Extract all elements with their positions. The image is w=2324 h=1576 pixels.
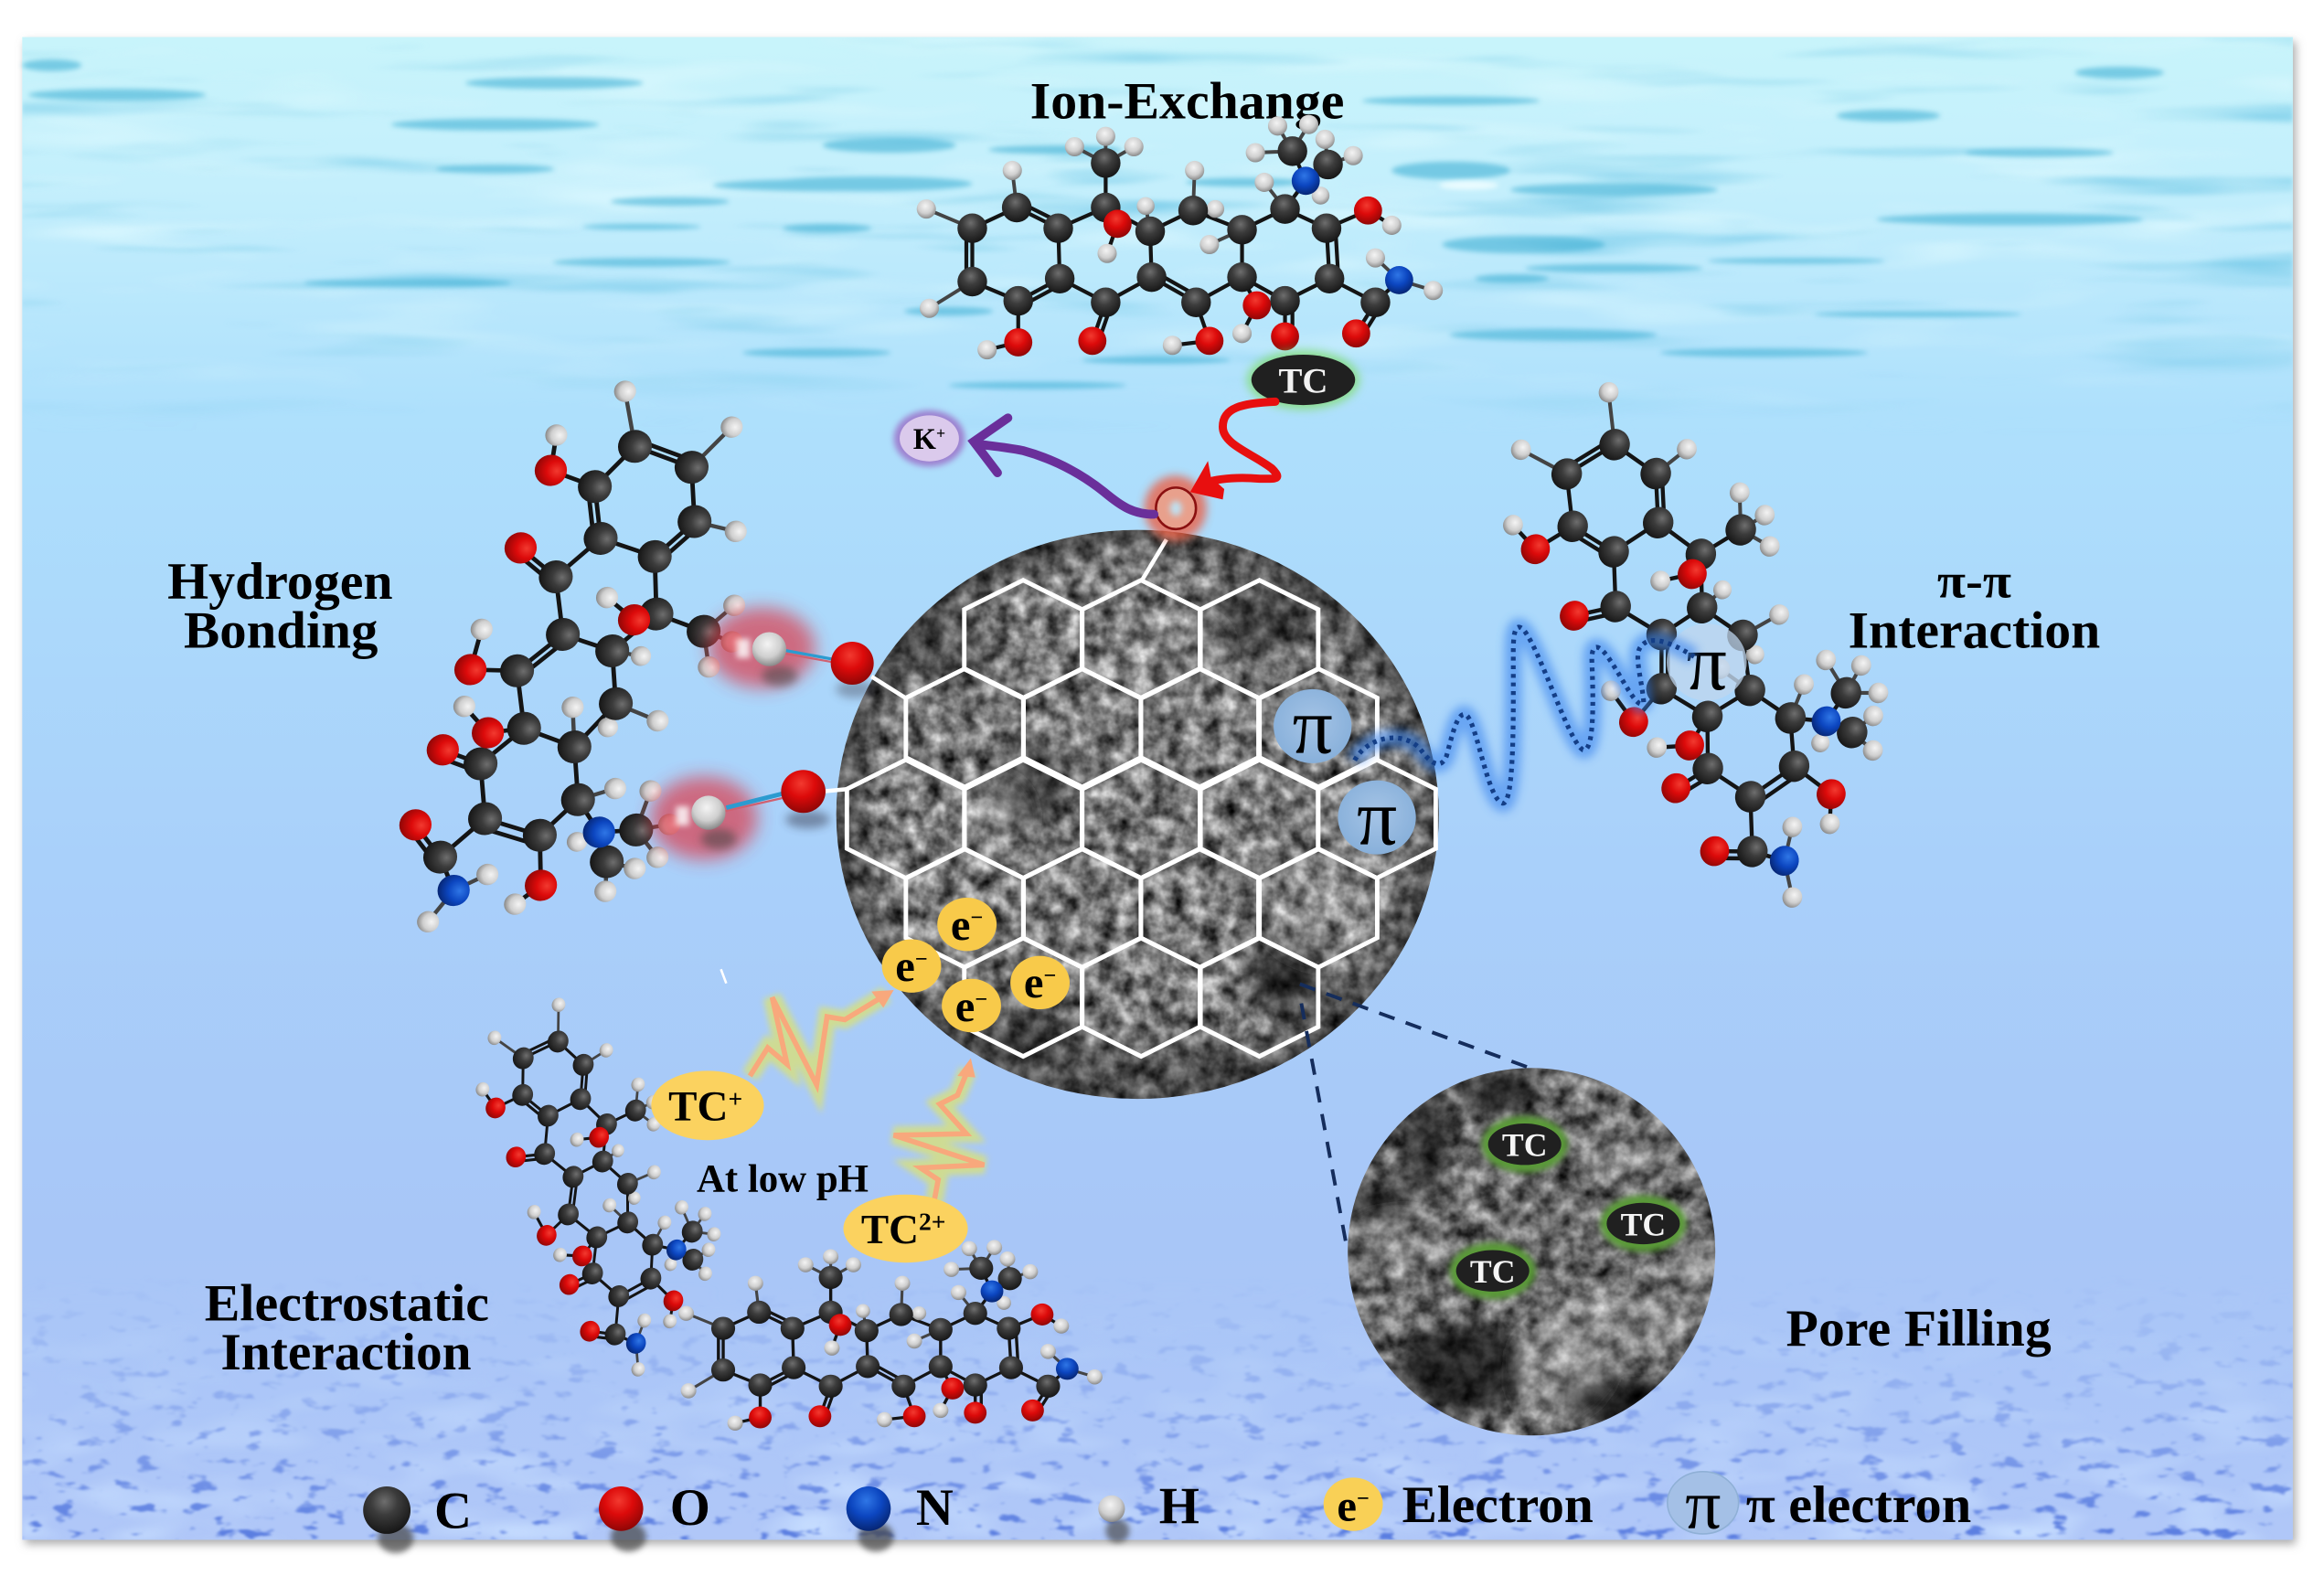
label: Electrostatic Interaction: Electrostatic [205,1274,489,1332]
electron badges on adsorbent: e [951,900,971,950]
pi electron on adsorbate: π [1687,618,1727,707]
panel: ion exchange arrows and badges [894,350,1359,541]
TC in pore 1 [1482,1116,1568,1173]
pi electrons on adsorbent: π [1357,772,1397,861]
legend: pi electron: π electron [1746,1476,1971,1534]
TC in pore 1: TC [1502,1127,1547,1164]
label: Electrostatic Interaction [205,1274,489,1381]
pi electron on adsorbate [1667,618,1747,707]
label: At low pH: At low pH [697,1156,869,1200]
K+ badge: K [913,423,936,456]
red arrow: TC to site [1190,401,1277,499]
electron badges on adsorbent: − [1043,964,1056,988]
legend: oxygen [599,1479,710,1551]
TC in pore 2 [1600,1196,1686,1251]
panel: pore filling SEM circle [1341,1061,1721,1441]
molecule: tetracycline (electrostatic bottom) [678,1240,1103,1431]
TC2+ badge: TC [861,1207,919,1252]
molecule: tetracycline (pi-pi) [1468,332,1955,944]
legend [363,1464,1971,1553]
K+ badge: + [936,424,945,442]
white tick mark [721,969,726,984]
electron badges on adsorbent: − [975,987,987,1012]
TC badge: TC [1278,362,1328,401]
electron badges on adsorbent: − [915,947,928,972]
legend: pi electron: π [1685,1464,1721,1543]
electron badges on adsorbent: e [955,982,975,1031]
label: Hydrogen Bonding: Hydrogen [167,553,393,611]
legend: hydrogen: H [1159,1478,1199,1536]
label: Hydrogen Bonding [167,553,393,659]
TC in pore 3: TC [1470,1253,1515,1290]
legend: electron: Electron [1402,1476,1594,1534]
pi electrons on adsorbent [1274,682,1416,861]
legend: carbon: C [434,1482,472,1539]
pi electrons on adsorbent: π [1293,682,1333,771]
label: pi-pi Interaction: π-π [1937,553,2011,608]
TC in pore 2: TC [1621,1206,1666,1242]
TC in pore 3 [1450,1242,1536,1299]
legend: carbon [363,1482,472,1553]
legend: electron: e [1337,1481,1357,1530]
dashed zoom lines to pore circle [1300,984,1536,1242]
hexagonal lattice lines [823,539,1435,1057]
title: Ion-Exchange: Ion-Exchange [1030,73,1344,131]
legend: oxygen: O [670,1479,710,1537]
hydrogen bond glow lower [651,777,757,859]
label: Hydrogen Bonding: Bonding [184,602,378,659]
TC+ badge: + [728,1084,742,1113]
electron badges on adsorbent: e [1024,958,1043,1007]
legend: nitrogen: N [916,1479,954,1537]
electron badges on adsorbent: − [971,906,983,931]
purple arrow: K+ released [974,418,1154,515]
hydrogen bond glow upper [709,608,816,687]
legend: pi electron [1668,1464,1971,1543]
hydrogen bond interactions [651,608,874,859]
molecule: tetracycline (hydrogen bonding) [351,358,836,1000]
electron badges on adsorbent: e [895,942,915,991]
TC+ badge [651,1070,764,1140]
K+ badge [894,410,965,466]
TC badge [1247,350,1359,410]
label: Electrostatic Interaction: Interaction [221,1324,472,1381]
TC+ badge: TC [668,1083,728,1131]
molecule: tetracycline (electrostatic left) [458,969,755,1398]
TC2+ badge [843,1195,968,1262]
TC2+ badge: 2+ [919,1208,945,1236]
legend: hydrogen [1098,1478,1199,1543]
molecule: tetracycline (ion exchange) [917,115,1443,359]
zigzag arrow: TC+ to electrons [750,990,894,1085]
wavy pi-pi interaction line [1355,627,1694,804]
legend: nitrogen [847,1479,954,1551]
bond lines [720,651,835,812]
zigzag arrow: TC2+ to electrons [894,1059,984,1203]
electron badges on adsorbent [882,898,1070,1032]
legend: electron: − [1357,1486,1370,1511]
panel: central adsorbent SEM circle with hexagonal lattice [721,518,1446,1105]
label: pi-pi Interaction: Interaction [1849,602,2100,659]
exchange site ring [1145,475,1207,541]
label: pi-pi Interaction [1849,553,2100,659]
label: Pore Filling: Pore Filling [1786,1300,2052,1358]
